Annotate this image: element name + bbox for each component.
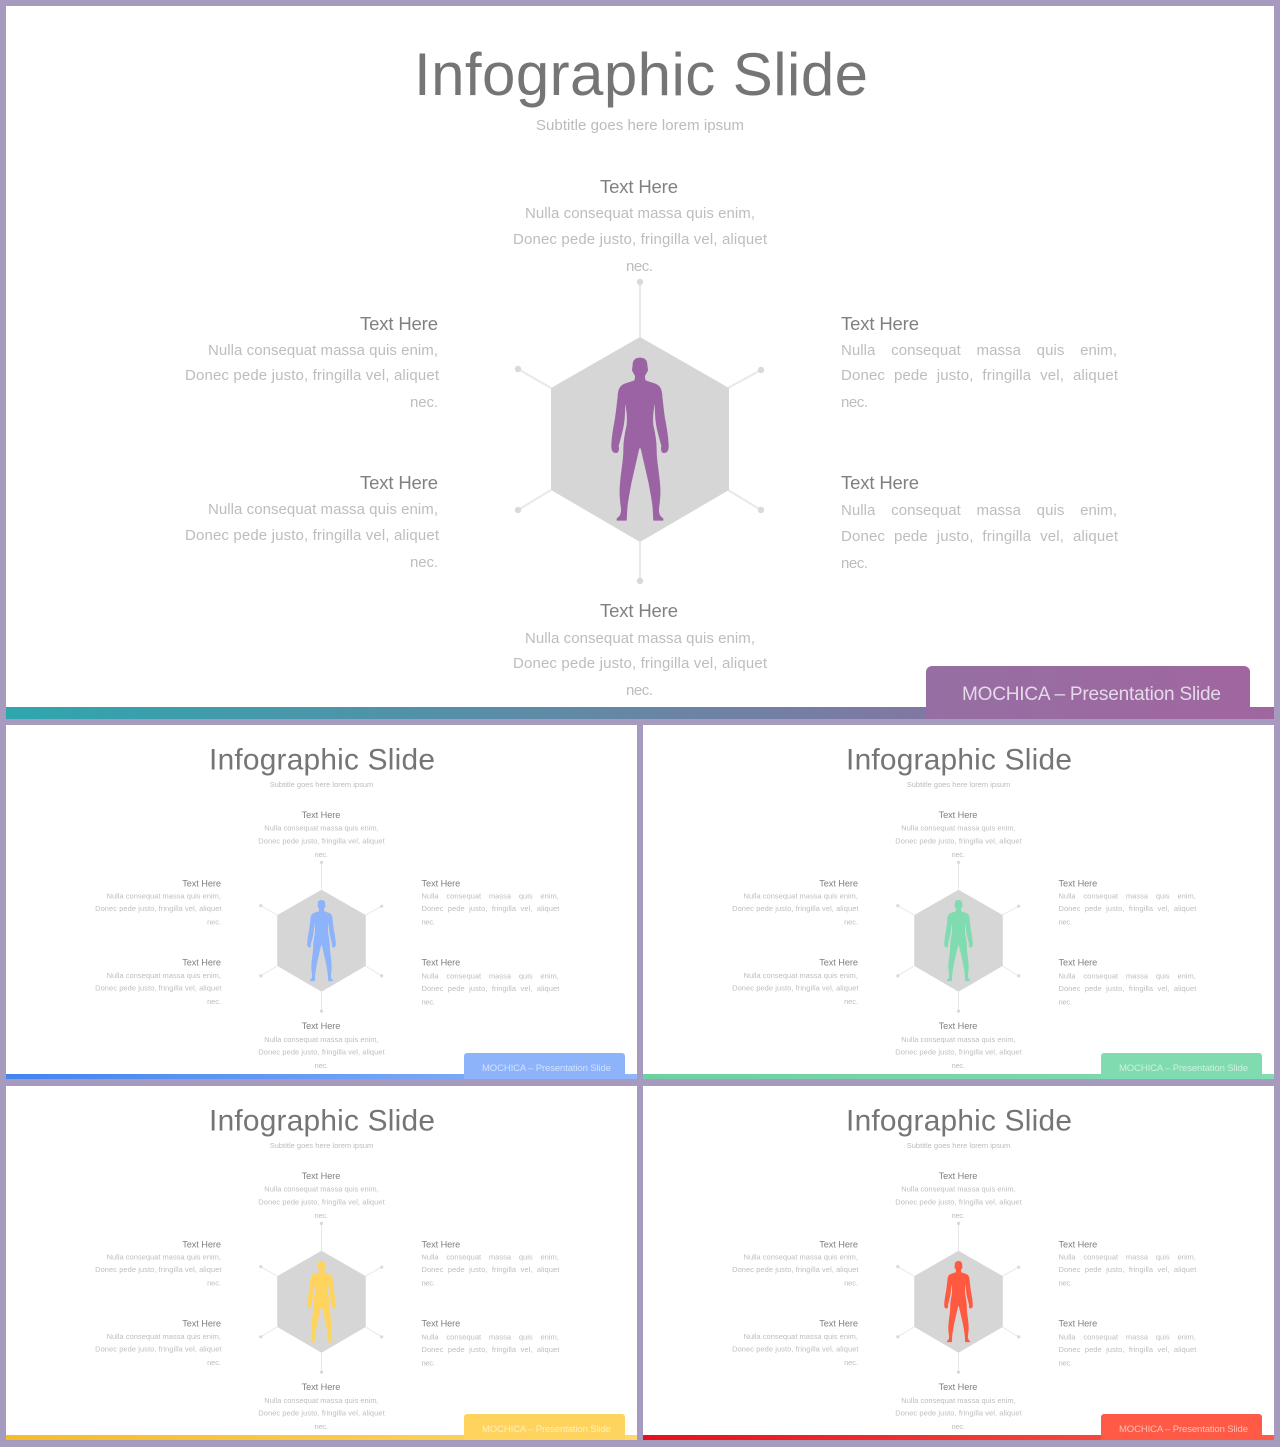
hexagon bbox=[277, 890, 366, 992]
text block: upper right: nec. bbox=[1058, 1279, 1072, 1288]
text block: upper left: Nulla consequat massa quis enim, bbox=[744, 892, 858, 901]
text block: lower right: Text Here bbox=[421, 957, 460, 967]
text block: lower left: Nulla consequat massa quis enim, bbox=[107, 971, 221, 980]
text block: top bbox=[258, 1171, 386, 1220]
text block: upper right bbox=[841, 313, 1119, 411]
text block: top: Text Here bbox=[939, 1171, 977, 1181]
text block: lower right: nec. bbox=[1058, 1359, 1072, 1368]
text block: lower left: nec. bbox=[207, 997, 221, 1006]
text block: bottom: Text Here bbox=[939, 1382, 977, 1392]
icon: human figure bbox=[307, 900, 336, 981]
text block: upper right bbox=[421, 878, 560, 927]
text block: lower left: Text Here bbox=[819, 1318, 858, 1328]
text block: bottom: Nulla consequat massa quis enim, bbox=[901, 1035, 1016, 1044]
text block: lower right: nec. bbox=[421, 1359, 435, 1368]
text block: lower right: Text Here bbox=[421, 1318, 460, 1328]
text block: bottom: Donec pede justo, fringilla vel, aliquet bbox=[258, 1047, 386, 1056]
text block: lower right: Text Here bbox=[1058, 1318, 1097, 1328]
text block: top: Nulla consequat massa quis enim, bbox=[264, 1185, 379, 1194]
text block: top: Nulla consequat massa quis enim, bbox=[901, 824, 1016, 833]
text block: top: Text Here bbox=[600, 176, 678, 197]
text block: bottom: nec. bbox=[952, 1422, 965, 1431]
text block: lower left: nec. bbox=[844, 997, 858, 1006]
text block: bottom bbox=[895, 1382, 1023, 1431]
title: Infographic Slide bbox=[846, 743, 1072, 776]
text block: top: nec. bbox=[626, 258, 653, 275]
text block: upper right: nec. bbox=[1058, 918, 1072, 927]
footer gradient bar bbox=[6, 1074, 637, 1079]
icon: human figure bbox=[611, 358, 669, 521]
icon: human figure bbox=[944, 1261, 973, 1342]
text block: lower right: Nulla consequat massa quis enim, bbox=[1058, 1332, 1196, 1341]
footer gradient bar bbox=[643, 1435, 1274, 1440]
connector lines and dots bbox=[515, 279, 764, 584]
footer tab: MOCHICA – Presentation Slide bbox=[482, 1063, 611, 1074]
text block: lower left: Donec pede justo, fringilla vel, aliquet bbox=[95, 984, 222, 993]
footer tab bbox=[926, 666, 1250, 719]
icon: human figure bbox=[944, 900, 973, 981]
text block: upper right: Text Here bbox=[1058, 1239, 1097, 1249]
subtitle: Subtitle goes here lorem ipsum bbox=[536, 117, 744, 134]
text block: upper left bbox=[732, 878, 859, 927]
text block: top bbox=[895, 810, 1023, 859]
text block: top: Nulla consequat massa quis enim, bbox=[901, 1185, 1016, 1194]
text block: upper left: nec. bbox=[207, 918, 221, 927]
text block: top bbox=[895, 1171, 1023, 1220]
hexagon bbox=[914, 890, 1003, 992]
text block: upper left: Text Here bbox=[819, 1239, 858, 1249]
text block: lower left: Text Here bbox=[819, 957, 858, 967]
text block: lower right: nec. bbox=[841, 555, 868, 572]
title: Infographic Slide bbox=[209, 1104, 435, 1137]
text block: bottom: nec. bbox=[315, 1061, 328, 1070]
text block: upper left bbox=[732, 1239, 859, 1288]
hexagon bbox=[277, 1251, 366, 1353]
text block: top: nec. bbox=[315, 850, 328, 859]
text block: upper right: Nulla consequat massa quis enim, bbox=[421, 892, 559, 901]
text block: upper right bbox=[421, 1239, 560, 1288]
text block: bottom: Donec pede justo, fringilla vel, aliquet bbox=[895, 1047, 1023, 1056]
text block: bottom: Donec pede justo, fringilla vel, aliquet bbox=[258, 1408, 386, 1417]
text block: lower left: Donec pede justo, fringilla vel, aliquet bbox=[95, 1345, 222, 1354]
footer tab bbox=[1101, 1414, 1262, 1440]
slide content: green bbox=[732, 743, 1197, 1070]
footer gradient bar bbox=[6, 1435, 637, 1440]
subtitle: Subtitle goes here lorem ipsum bbox=[270, 1141, 373, 1150]
text block: lower left bbox=[732, 957, 859, 1006]
hexagon bbox=[551, 337, 729, 542]
text block: lower right: Nulla consequat massa quis enim, bbox=[841, 502, 1117, 519]
text block: top: Donec pede justo, fringilla vel, aliquet bbox=[258, 1197, 386, 1206]
text block: top: Donec pede justo, fringilla vel, aliquet bbox=[258, 836, 386, 845]
text block: upper left: Donec pede justo, fringilla vel, aliquet bbox=[95, 904, 222, 913]
subtitle: Subtitle goes here lorem ipsum bbox=[270, 780, 373, 789]
text block: upper right: Text Here bbox=[841, 313, 919, 334]
text block: upper right: Donec pede justo, fringilla vel, aliquet bbox=[1058, 1265, 1197, 1274]
text block: bottom: Donec pede justo, fringilla vel, aliquet bbox=[895, 1408, 1023, 1417]
text block: lower right: Nulla consequat massa quis enim, bbox=[421, 971, 559, 980]
text block: lower left: Text Here bbox=[182, 957, 221, 967]
text block: upper left: Donec pede justo, fringilla vel, aliquet bbox=[95, 1265, 222, 1274]
text block: upper right bbox=[1058, 878, 1197, 927]
footer tab bbox=[464, 1053, 625, 1079]
text block: upper right: Text Here bbox=[1058, 878, 1097, 888]
text block: upper right: nec. bbox=[421, 918, 435, 927]
connector lines and dots bbox=[896, 1222, 1020, 1374]
text block: upper left: Nulla consequat massa quis enim, bbox=[208, 342, 438, 359]
text block: top: Text Here bbox=[302, 810, 340, 820]
text block: upper left bbox=[185, 313, 440, 411]
text block: top: nec. bbox=[315, 1211, 328, 1220]
text block: bottom: nec. bbox=[315, 1422, 328, 1431]
text block: upper right: Text Here bbox=[421, 1239, 460, 1249]
text block: lower right bbox=[1058, 1318, 1197, 1368]
panel: yellow slide bbox=[6, 1086, 637, 1440]
text block: top: Donec pede justo, fringilla vel, aliquet bbox=[895, 836, 1023, 845]
text block: lower left: Donec pede justo, fringilla vel, aliquet bbox=[732, 984, 859, 993]
slide content: blue bbox=[95, 743, 560, 1070]
text block: lower left: Nulla consequat massa quis enim, bbox=[208, 501, 438, 518]
text block: upper left: Text Here bbox=[182, 878, 221, 888]
text block: upper left: nec. bbox=[844, 1279, 858, 1288]
text block: upper right: Text Here bbox=[421, 878, 460, 888]
footer tab: MOCHICA – Presentation Slide bbox=[962, 684, 1221, 705]
text block: top: nec. bbox=[952, 850, 965, 859]
text block: lower left: Nulla consequat massa quis enim, bbox=[744, 971, 858, 980]
text block: upper left: Text Here bbox=[360, 313, 438, 334]
text block: top bbox=[513, 176, 768, 275]
text block: lower right: Nulla consequat massa quis enim, bbox=[1058, 971, 1196, 980]
text block: bottom: Text Here bbox=[600, 600, 678, 621]
text block: upper left: nec. bbox=[207, 1279, 221, 1288]
text block: top: Donec pede justo, fringilla vel, aliquet bbox=[513, 231, 768, 248]
text block: lower right: nec. bbox=[421, 998, 435, 1007]
title: Infographic Slide bbox=[846, 1104, 1072, 1137]
text block: upper left: Nulla consequat massa quis enim, bbox=[107, 1253, 221, 1262]
text block: lower left bbox=[95, 1318, 222, 1367]
panel: red slide bbox=[643, 1086, 1274, 1440]
subtitle: Subtitle goes here lorem ipsum bbox=[907, 780, 1010, 789]
title: Infographic Slide bbox=[414, 41, 868, 108]
text block: top: Text Here bbox=[939, 810, 977, 820]
slide content: red bbox=[732, 1104, 1197, 1431]
text block: upper right: Donec pede justo, fringilla vel, aliquet bbox=[841, 367, 1119, 384]
text block: lower right: Donec pede justo, fringilla vel, aliquet bbox=[421, 1345, 560, 1354]
connector lines and dots bbox=[259, 1222, 383, 1374]
text block: lower right: nec. bbox=[1058, 998, 1072, 1007]
footer tab: MOCHICA – Presentation Slide bbox=[482, 1424, 611, 1435]
connector lines and dots bbox=[896, 861, 1020, 1013]
text block: lower right bbox=[421, 1318, 560, 1368]
text block: bottom: Text Here bbox=[302, 1021, 340, 1031]
text block: lower left: Nulla consequat massa quis enim, bbox=[107, 1332, 221, 1341]
text block: lower right: Donec pede justo, fringilla vel, aliquet bbox=[1058, 1345, 1197, 1354]
text block: lower left: Text Here bbox=[182, 1318, 221, 1328]
text block: upper left bbox=[95, 1239, 222, 1288]
text block: upper left: Donec pede justo, fringilla vel, aliquet bbox=[732, 1265, 859, 1274]
text block: upper left bbox=[95, 878, 222, 927]
text block: bottom bbox=[258, 1382, 386, 1431]
text block: upper right: Donec pede justo, fringilla vel, aliquet bbox=[421, 904, 560, 913]
text block: upper left: Text Here bbox=[819, 878, 858, 888]
text block: upper left: nec. bbox=[844, 918, 858, 927]
text block: lower left: Text Here bbox=[360, 472, 438, 493]
text block: lower left bbox=[95, 957, 222, 1006]
text block: upper right: Nulla consequat massa quis enim, bbox=[841, 342, 1117, 359]
text block: lower right: Text Here bbox=[841, 472, 919, 493]
text block: lower right: Donec pede justo, fringilla vel, aliquet bbox=[841, 528, 1119, 545]
text block: bottom: nec. bbox=[952, 1061, 965, 1070]
text block: upper right: nec. bbox=[421, 1279, 435, 1288]
text block: lower right: Nulla consequat massa quis enim, bbox=[421, 1332, 559, 1341]
footer gradient bar bbox=[6, 707, 1274, 719]
text block: upper left: Nulla consequat massa quis enim, bbox=[107, 892, 221, 901]
text block: lower left: nec. bbox=[207, 1358, 221, 1367]
text block: bottom: Nulla consequat massa quis enim, bbox=[264, 1396, 379, 1405]
text block: bottom: Donec pede justo, fringilla vel, aliquet bbox=[513, 655, 768, 672]
text block: lower right: Donec pede justo, fringilla vel, aliquet bbox=[1058, 984, 1197, 993]
text block: upper right bbox=[1058, 1239, 1197, 1288]
text block: lower left: Nulla consequat massa quis enim, bbox=[744, 1332, 858, 1341]
text block: bottom bbox=[513, 600, 768, 699]
hexagon bbox=[914, 1251, 1003, 1353]
text block: bottom: Nulla consequat massa quis enim, bbox=[264, 1035, 379, 1044]
text block: lower left bbox=[185, 472, 440, 571]
text block: bottom: nec. bbox=[626, 682, 653, 699]
subtitle: Subtitle goes here lorem ipsum bbox=[907, 1141, 1010, 1150]
text block: lower left: Donec pede justo, fringilla vel, aliquet bbox=[185, 527, 440, 544]
text block: upper right: Nulla consequat massa quis enim, bbox=[1058, 1253, 1196, 1262]
footer tab bbox=[464, 1414, 625, 1440]
text block: lower left bbox=[732, 1318, 859, 1367]
slide content: yellow bbox=[95, 1104, 560, 1431]
text block: top: Nulla consequat massa quis enim, bbox=[264, 824, 379, 833]
text block: top: Nulla consequat massa quis enim, bbox=[525, 205, 755, 222]
footer tab: MOCHICA – Presentation Slide bbox=[1119, 1063, 1248, 1074]
text block: upper right: Nulla consequat massa quis enim, bbox=[421, 1253, 559, 1262]
text block: upper left: Donec pede justo, fringilla vel, aliquet bbox=[732, 904, 859, 913]
text block: top bbox=[258, 810, 386, 859]
footer tab bbox=[1101, 1053, 1262, 1079]
text block: bottom bbox=[258, 1021, 386, 1070]
text block: lower right bbox=[421, 957, 560, 1007]
text block: top: nec. bbox=[952, 1211, 965, 1220]
text block: lower right bbox=[1058, 957, 1197, 1007]
text block: upper left: nec. bbox=[410, 394, 438, 411]
icon: human figure bbox=[307, 1261, 336, 1342]
panel: main purple slide bbox=[6, 6, 1274, 719]
footer gradient bar bbox=[643, 1074, 1274, 1079]
text block: lower left: Donec pede justo, fringilla vel, aliquet bbox=[732, 1345, 859, 1354]
text block: bottom: Nulla consequat massa quis enim, bbox=[525, 630, 755, 647]
text block: upper right: Nulla consequat massa quis enim, bbox=[1058, 892, 1196, 901]
text block: top: Donec pede justo, fringilla vel, aliquet bbox=[895, 1197, 1023, 1206]
footer tab: MOCHICA – Presentation Slide bbox=[1119, 1424, 1248, 1435]
title: Infographic Slide bbox=[209, 743, 435, 776]
text block: upper right: Donec pede justo, fringilla vel, aliquet bbox=[1058, 904, 1197, 913]
text block: upper left: Nulla consequat massa quis enim, bbox=[744, 1253, 858, 1262]
text block: upper left: Text Here bbox=[182, 1239, 221, 1249]
text block: upper left: Donec pede justo, fringilla vel, aliquet bbox=[185, 367, 440, 384]
text block: bottom: Nulla consequat massa quis enim, bbox=[901, 1396, 1016, 1405]
text block: lower left: nec. bbox=[844, 1358, 858, 1367]
text block: top: Text Here bbox=[302, 1171, 340, 1181]
text block: upper right: nec. bbox=[841, 394, 868, 411]
text block: lower right: Text Here bbox=[1058, 957, 1097, 967]
text block: upper right: Donec pede justo, fringilla vel, aliquet bbox=[421, 1265, 560, 1274]
text block: lower right: Donec pede justo, fringilla vel, aliquet bbox=[421, 984, 560, 993]
text block: lower left: nec. bbox=[410, 554, 438, 571]
panel: blue slide bbox=[6, 725, 637, 1079]
text block: bottom: Text Here bbox=[939, 1021, 977, 1031]
text block: bottom: Text Here bbox=[302, 1382, 340, 1392]
text block: lower right bbox=[841, 472, 1119, 572]
text block: bottom bbox=[895, 1021, 1023, 1070]
panel: green slide bbox=[643, 725, 1274, 1079]
connector lines and dots bbox=[259, 861, 383, 1013]
